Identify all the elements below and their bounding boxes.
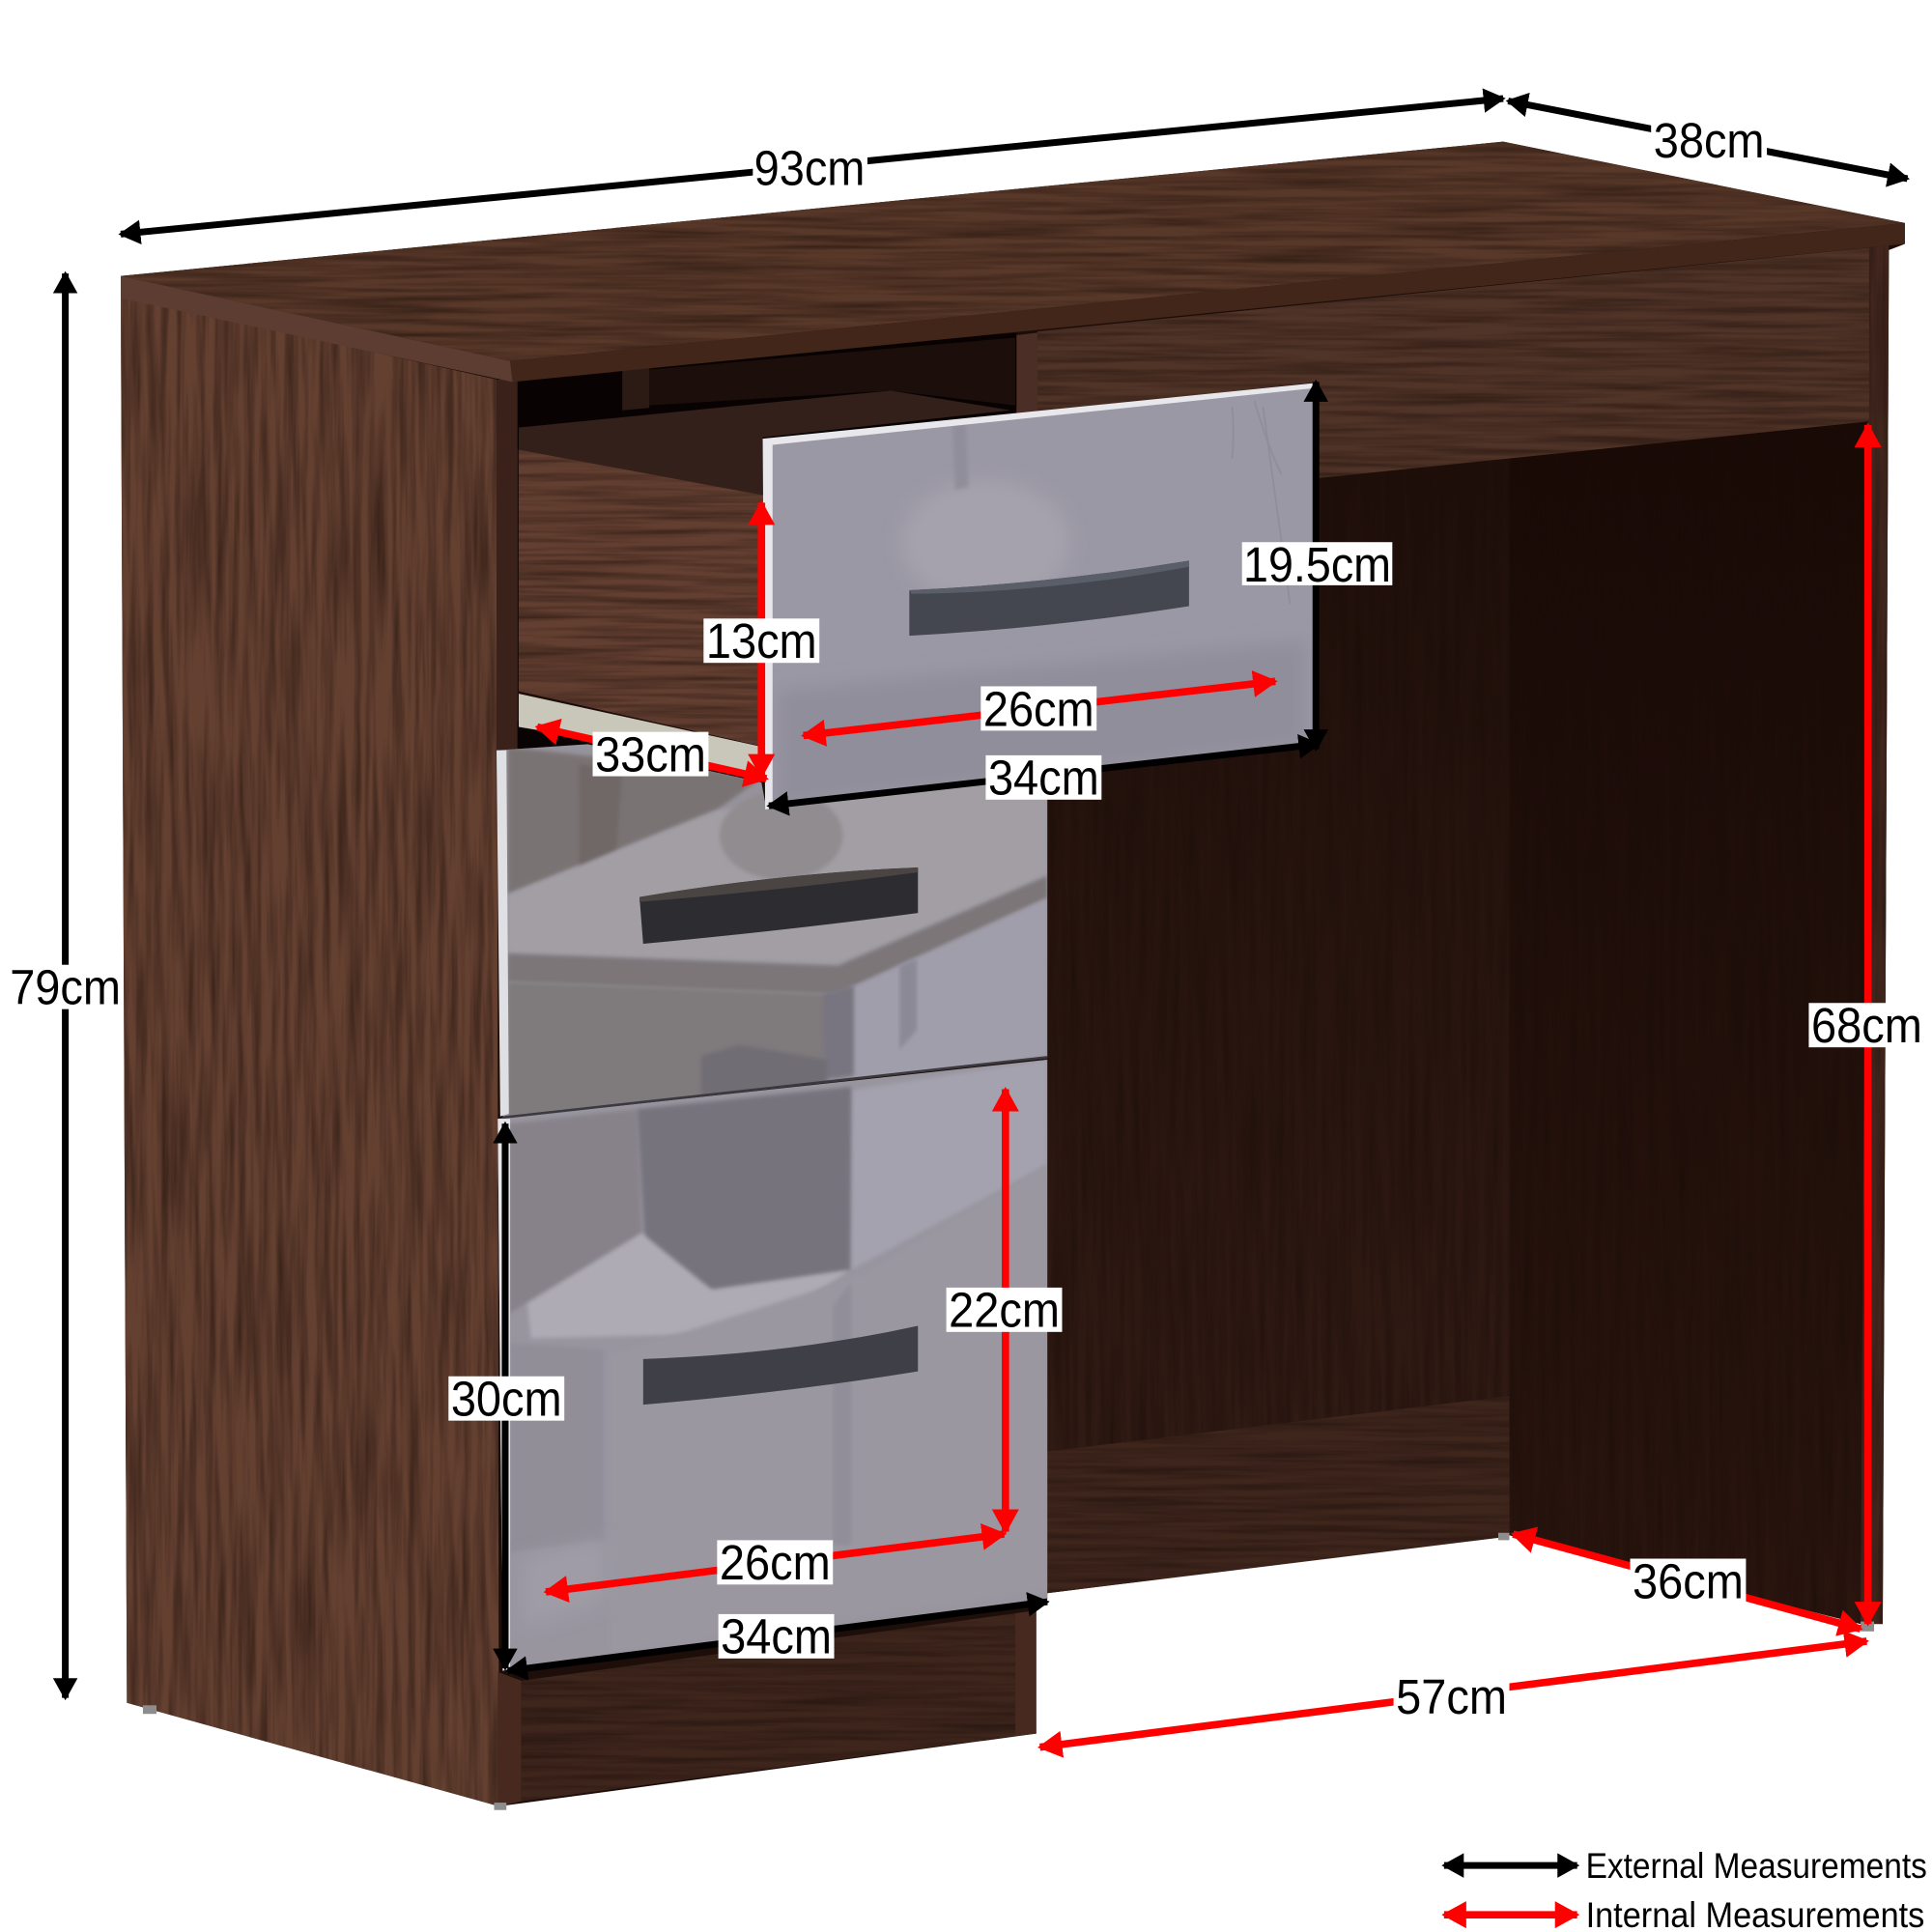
measurement: internal drawer depth 33cm: 33cm bbox=[595, 726, 706, 781]
bottom reflection: rug bbox=[680, 1291, 815, 1335]
plinth top shadow bbox=[502, 1600, 1047, 1681]
compartment rear panel bbox=[649, 337, 1015, 406]
middle drawer front bbox=[497, 744, 1047, 1117]
plinth edge right bbox=[1015, 1610, 1037, 1736]
measurement: knee height 68cm: 68cm bbox=[1811, 998, 1922, 1053]
middle reflection: vase bbox=[720, 791, 842, 880]
measurement: top drawer width 34cm: 34cm bbox=[988, 751, 1099, 806]
middle reflection: lower right bbox=[850, 898, 1047, 1084]
bottom drawer front bbox=[497, 1060, 1047, 1671]
plinth panel bbox=[522, 1613, 1015, 1802]
shadow under drawer bbox=[497, 721, 591, 754]
top reflection: smudge bbox=[952, 424, 969, 491]
middle reflection: table apron bbox=[508, 876, 1047, 994]
bottom reflection: leg bbox=[835, 1292, 848, 1543]
measurement: knee width 57cm: 57cm bbox=[1396, 1669, 1507, 1724]
compartment rear post bbox=[622, 368, 649, 411]
middle reflection: front leg bbox=[823, 985, 854, 1079]
measurement: internal bottom drawer height 22cm: 22cm bbox=[949, 1283, 1060, 1338]
top reflection: stems bbox=[1233, 401, 1290, 604]
middle reflection: table top bbox=[508, 774, 1047, 965]
measurement: internal bottom drawer height 22cm bbox=[947, 1090, 1062, 1531]
middle reflection: lower left bbox=[508, 982, 831, 1119]
table top surface bbox=[121, 142, 1905, 361]
measurement: knee depth 36cm bbox=[1513, 1534, 1861, 1629]
right inner side panel bbox=[1509, 421, 1870, 1627]
legend bbox=[1444, 1846, 1927, 1932]
middle reflection: shelf column bbox=[579, 764, 622, 868]
bottom reflection: upper left bbox=[509, 1109, 642, 1314]
measurement: knee height 68cm bbox=[1808, 425, 1924, 1624]
middle drawer reflections bbox=[508, 747, 1047, 1119]
bottom drawer handle bbox=[643, 1325, 918, 1405]
measurement: width 93cm bbox=[121, 99, 1503, 234]
bottom reflection: left floor patch bbox=[524, 1540, 604, 1627]
top rail bbox=[1037, 247, 1869, 478]
drawer rear interior bbox=[519, 390, 1010, 496]
bottom reflection: table top bbox=[527, 1234, 850, 1338]
measurement: depth 38cm: 38cm bbox=[1654, 113, 1765, 168]
measurement: depth 38cm bbox=[1508, 101, 1907, 179]
middle reflection: basket handle bbox=[701, 1045, 828, 1094]
bottom reflection: left dim band bbox=[510, 1343, 604, 1552]
bottom reflection: basket bbox=[637, 1087, 851, 1290]
inner front stile bbox=[497, 380, 518, 754]
carcass silhouette bbox=[121, 142, 1905, 1806]
bottom reflection: upper right bbox=[850, 1060, 1047, 1270]
middle reflection: wall bbox=[508, 747, 764, 895]
top reflection: pillow bbox=[902, 480, 1069, 604]
left side panel bbox=[121, 296, 499, 1806]
measurement: internal drawer height 13cm: 13cm bbox=[706, 613, 817, 668]
measurement: internal bottom drawer width 26cm: 26cm bbox=[720, 1535, 831, 1590]
measurement: height 79cm bbox=[9, 273, 124, 1698]
measurement: drawer front height 19.5cm: 19.5cm bbox=[1243, 537, 1391, 592]
measurement: drawer front height 19.5cm bbox=[1242, 382, 1392, 750]
plinth edge left bbox=[497, 1672, 522, 1806]
top drawer handle bbox=[909, 560, 1189, 636]
feet bbox=[143, 1533, 1874, 1810]
furniture: dressing table bbox=[121, 142, 1905, 1810]
bottom drawer reflections bbox=[509, 1060, 1047, 1651]
measurement: internal drawer height 13cm bbox=[703, 502, 819, 777]
middle drawer handle bbox=[639, 867, 918, 944]
measurement: width 93cm: 93cm bbox=[754, 140, 865, 195]
measurement: top drawer width 34cm bbox=[769, 744, 1319, 806]
measurement: internal drawer depth 33cm bbox=[537, 726, 766, 781]
compartment divider post bbox=[1016, 332, 1037, 414]
measurement: bottom drawer width 34cm bbox=[508, 1602, 1047, 1671]
measurement: knee depth 36cm: 36cm bbox=[1633, 1553, 1744, 1608]
top drawer front bbox=[764, 384, 1319, 810]
measurement: internal top drawer width 26cm: 26cm bbox=[983, 681, 1094, 736]
top reflection: lower shade bbox=[777, 640, 1306, 807]
bottom front white edge bbox=[497, 1119, 510, 1671]
right leg front edge bbox=[1861, 245, 1889, 1624]
drawer runner bbox=[519, 694, 761, 781]
top drawer reflections bbox=[777, 401, 1306, 807]
measurement: height 79cm: 79cm bbox=[10, 960, 121, 1015]
measurement: internal bottom drawer width 26cm bbox=[546, 1534, 1005, 1592]
lower back stretcher bbox=[1047, 1396, 1509, 1593]
drawer side bbox=[519, 450, 764, 747]
back panel bbox=[1037, 407, 1513, 1457]
measurement: bottom drawer width 34cm: 34cm bbox=[721, 1609, 832, 1664]
top drawer white edge bbox=[763, 384, 1315, 810]
measurement: bottom drawer height 30cm: 30cm bbox=[451, 1372, 562, 1427]
table top side edge bbox=[121, 276, 513, 382]
gap between drawers bbox=[502, 1057, 1047, 1118]
table top front edge bbox=[510, 223, 1905, 382]
measurement: knee width 57cm bbox=[1040, 1641, 1866, 1747]
middle front white edge bbox=[497, 751, 509, 1117]
middle reflection: rear leg bbox=[899, 958, 917, 1050]
measurement: bottom drawer height 30cm bbox=[448, 1123, 564, 1668]
open top compartment bbox=[497, 332, 1016, 450]
measurement: internal top drawer width 26cm bbox=[804, 681, 1275, 736]
